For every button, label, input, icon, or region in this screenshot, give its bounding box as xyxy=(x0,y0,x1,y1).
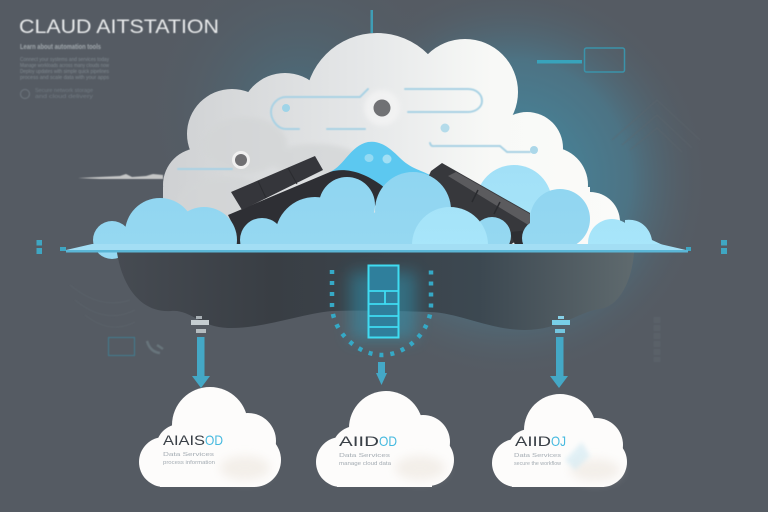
blue foreground clouds xyxy=(66,172,686,283)
subtitle and description text block: and cloud delivery xyxy=(35,94,93,100)
side markers xyxy=(36,240,727,254)
title: CLAUD AITSTATION xyxy=(19,17,219,38)
center server icon with dotted arc xyxy=(332,266,431,355)
cloud card 2: Data Services xyxy=(339,453,390,459)
solar panel left xyxy=(228,156,385,246)
right arrow xyxy=(550,316,570,388)
main white cloud xyxy=(163,33,620,252)
light blue cloud behind right panel xyxy=(476,165,552,241)
cloud card 1: OD xyxy=(205,432,223,448)
subtitle and description text block xyxy=(20,42,109,100)
left faint box and phone glyph xyxy=(108,338,163,356)
subtitle and description text block: Manage workloads across many clouds now xyxy=(20,63,109,69)
blue peak xyxy=(330,142,430,190)
top right connector and box xyxy=(537,48,624,72)
cloud card 2: manage cloud data xyxy=(339,461,392,467)
cloud card 3: secure the workflow xyxy=(514,461,561,467)
cloud card 1: AIAIS xyxy=(163,432,205,448)
subtitle and description text block: process and scale data with your apps xyxy=(20,75,109,81)
cloud card 3 xyxy=(492,394,627,487)
cloud card 1: process information xyxy=(163,460,215,466)
cloud card 2: AIID xyxy=(339,433,379,449)
subtitle and description text block: Connect your systems and services today xyxy=(20,57,109,63)
cloud card 1: Data Services xyxy=(163,452,214,458)
subtitle and description text block: Deploy updates with simple quick pipelines xyxy=(20,69,109,75)
dark underside shape xyxy=(117,252,634,330)
subtitle and description text block: Learn about automation tools xyxy=(20,42,101,51)
smoke line left xyxy=(78,174,163,179)
cloud card 2 xyxy=(316,391,454,487)
cloud card 1 xyxy=(139,387,281,487)
inner grey smoke xyxy=(177,117,360,233)
solar panel right xyxy=(420,163,530,245)
cloud card 3: AIID xyxy=(515,433,551,449)
center arrow xyxy=(376,362,387,385)
top connector line xyxy=(370,10,373,33)
left arrow xyxy=(191,316,210,388)
circuit lines in the cloud xyxy=(178,89,530,169)
cloud circuit nodes xyxy=(232,90,538,169)
cloud card 2: OD xyxy=(379,433,397,449)
subtitle and description text block: Secure network storage xyxy=(35,88,93,94)
faint decoration: left mesh and right chevrons xyxy=(70,100,700,362)
cloud card 3: Data Services xyxy=(514,453,561,459)
cloud card 3: OJ xyxy=(551,433,566,449)
horizon line xyxy=(66,250,688,252)
